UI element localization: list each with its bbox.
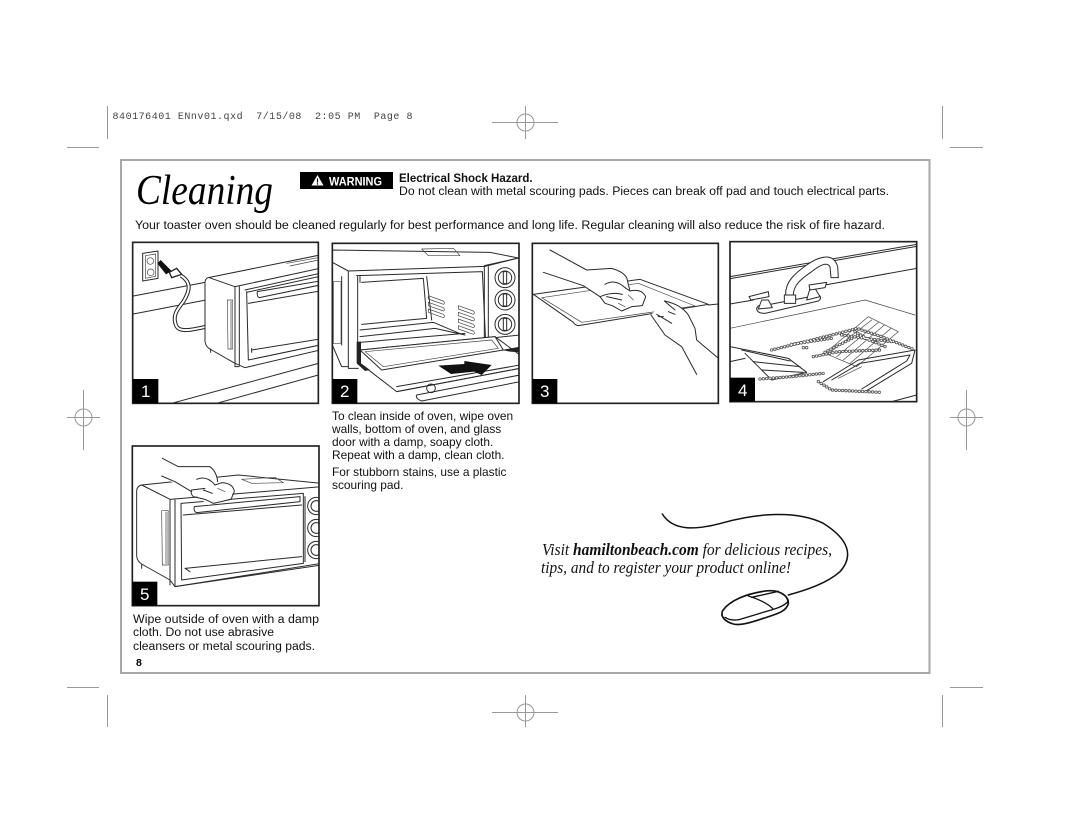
website callout: Visit hamiltonbeach.com for delicious recipes, [542, 540, 832, 559]
page border panel [121, 160, 930, 673]
step number 1: 1 [141, 382, 150, 401]
step 2 instructions: For stubborn stains, use a plastic [332, 465, 507, 479]
step number 2: 2 [340, 382, 349, 401]
crop and registration marks [67, 106, 983, 727]
website callout: tips, and to register your product online! [541, 558, 791, 577]
step number 3: 3 [540, 382, 549, 401]
step 5 instructions [133, 614, 319, 653]
warning text: Do not clean with metal scouring pads. Pieces can break off pad and touch electrical parts. [399, 186, 889, 198]
step 5 instructions: cloth. Do not use abrasive [133, 627, 274, 639]
step 2 instructions [331, 409, 513, 492]
page number: 8 [136, 657, 142, 669]
page artwork [67, 106, 983, 727]
step 2 instructions: door with a damp, soapy cloth. [332, 435, 493, 449]
step number 4: 4 [738, 381, 747, 400]
step 2 instructions: scouring pad. [332, 478, 403, 492]
warning badge [300, 172, 393, 189]
panel 5: wipe outside of oven [132, 446, 325, 606]
step 2 instructions: Repeat with a damp, clean cloth. [332, 448, 505, 462]
panel 1: unplug the oven [133, 242, 320, 403]
website callout [541, 540, 832, 577]
panel 4: wash parts in the sink [730, 242, 917, 402]
step number 5: 5 [140, 585, 149, 604]
step 5 instructions: Wipe outside of oven with a damp [133, 614, 319, 626]
step 2 instructions: walls, bottom of oven, and glass [331, 422, 501, 436]
print header slug: 840176401 ENnv01.qxd 7/15/08 2:05 PM Page 8 [112, 111, 412, 123]
step 2 instructions: To clean inside of oven, wipe oven [332, 409, 513, 423]
warning text [399, 173, 889, 198]
intro paragraph: Your toaster oven should be cleaned regularly for best performance and long life. Regular cleaning will also reduce the risk of fire hazard. [135, 220, 885, 232]
panel 2: remove crumb tray [332, 243, 520, 403]
icon: computer mouse with cord [662, 514, 848, 625]
step 5 instructions: cleansers or metal scouring pads. [133, 641, 315, 653]
warning badge: WARNING [329, 176, 382, 188]
warning text: Electrical Shock Hazard. [399, 173, 533, 185]
title: Cleaning [136, 168, 273, 214]
panel 3: wipe the tray [532, 243, 718, 403]
